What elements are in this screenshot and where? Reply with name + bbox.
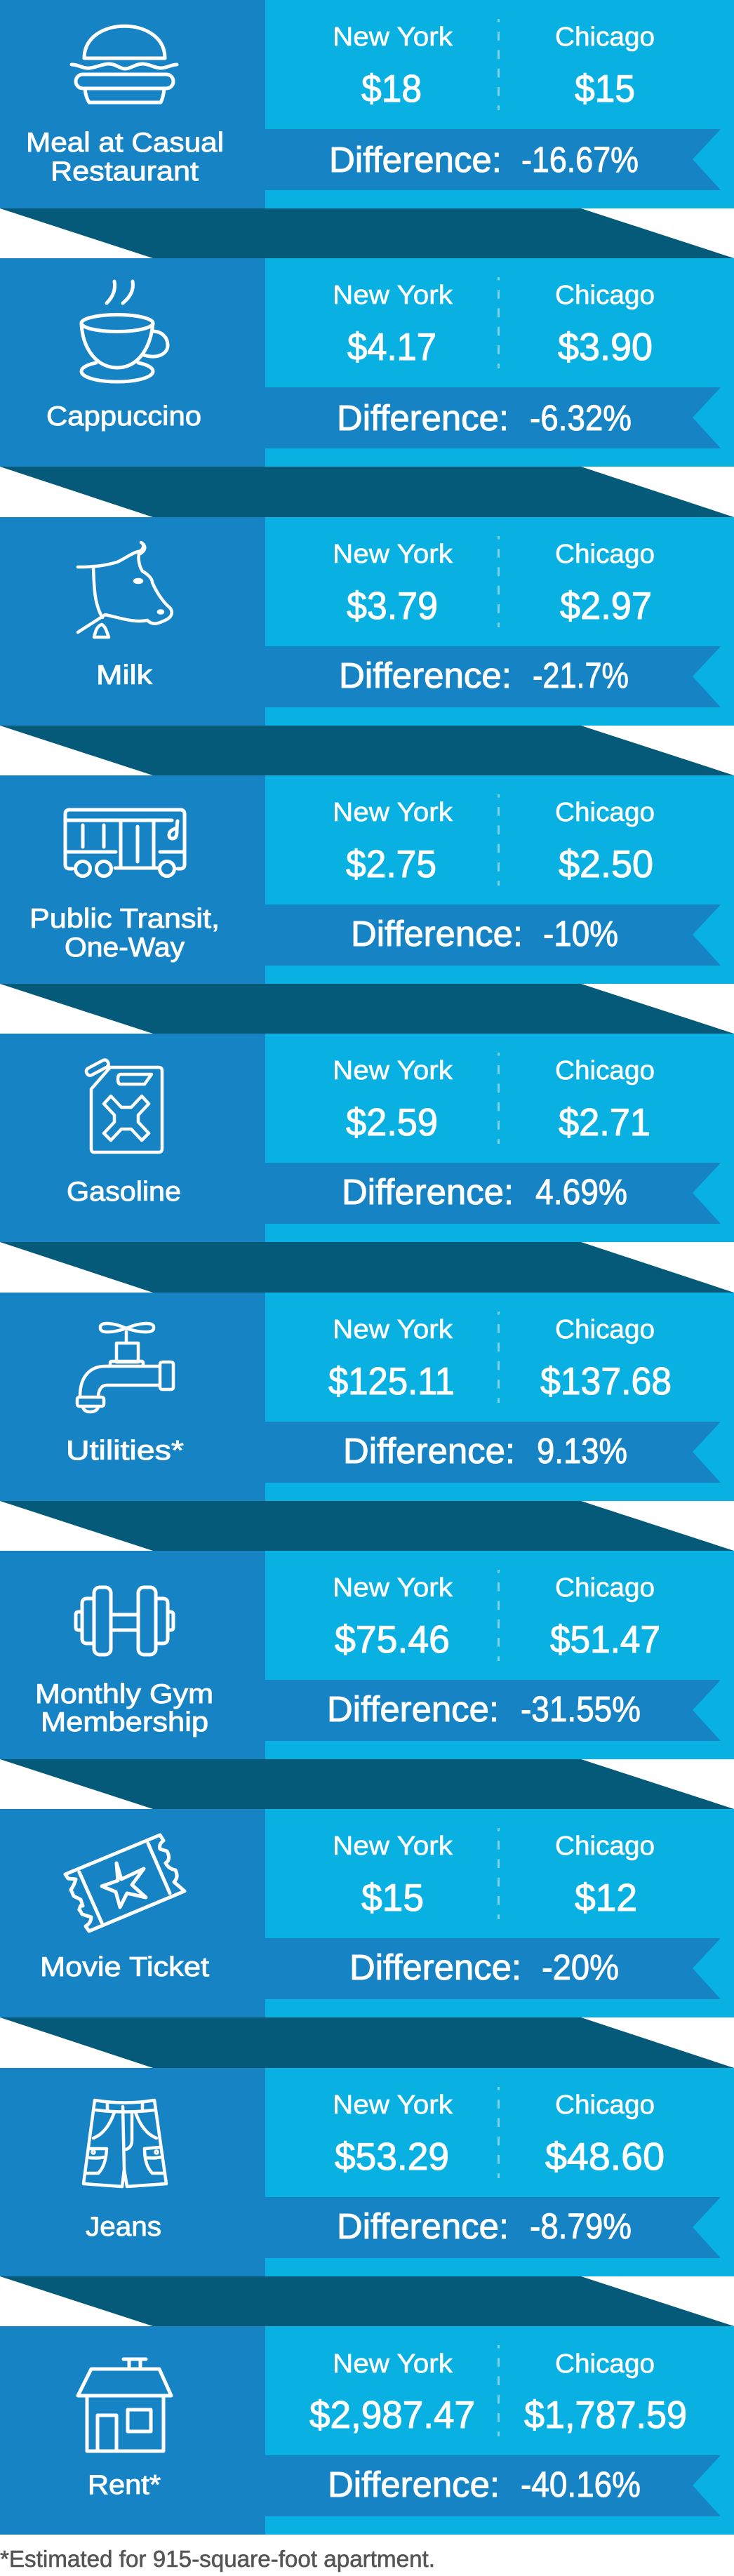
fold band 4 [0,984,734,1034]
footnote: *Estimated for 915-square-foot apartment. [0,2546,435,2572]
new york price [333,1831,453,1919]
icon: faucet [77,1323,173,1412]
chicago price [545,2090,665,2178]
new york price: $18 [361,67,422,110]
label: Jeans [86,2212,161,2242]
icon: house [78,2359,171,2451]
new york price: $75.46 [335,1617,450,1661]
difference: Difference: [342,1172,514,1212]
chicago price: Chicago [555,22,655,52]
difference: 9.13% [537,1431,627,1471]
chicago price [555,281,655,368]
chicago price: $137.68 [540,1359,672,1403]
icon: jeans [84,2100,166,2187]
new york price: $2.75 [346,842,436,886]
label: Public Transit, [29,904,220,934]
label [29,904,220,963]
chicago price: Chicago [555,540,655,569]
chicago price: Chicago [555,2349,655,2379]
chicago price: Chicago [555,1573,655,1603]
panel: utilities [0,1293,734,1501]
label: Movie Ticket [40,1952,209,1982]
chicago price: $12 [575,1876,637,1919]
chicago price [555,798,655,886]
chicago price: $2.97 [560,584,652,627]
new york price [333,22,453,110]
label: Gasoline [67,1177,181,1207]
icon: coffee cup [81,281,168,382]
new york price: New York [333,281,453,310]
difference: -10% [543,914,618,954]
fold band 1 [0,208,734,258]
label: Restaurant [51,156,199,187]
fold band 5 [0,1242,734,1293]
difference: -40.16% [521,2464,641,2504]
label: Rent* [88,2470,161,2500]
fold band 8 [0,2017,734,2068]
chicago price: $1,787.59 [524,2393,687,2436]
new york price [328,1315,455,1403]
chicago price: Chicago [555,1056,655,1086]
chicago price [524,2349,687,2436]
difference: -8.79% [530,2206,632,2246]
new york price: $53.29 [335,2135,449,2178]
new york price: New York [333,540,453,569]
label: Utilities* [66,1436,184,1466]
chicago price: $15 [575,67,635,110]
chicago price: Chicago [555,798,655,827]
panel: public transit [0,775,734,984]
icon: dumbbell [76,1587,173,1655]
new york price: New York [333,1831,453,1861]
new york price: $15 [361,1876,424,1919]
difference [339,655,629,695]
panel: rent [0,2326,734,2535]
difference [327,1689,641,1729]
difference [328,2464,641,2504]
label: Cappuccino [46,401,201,432]
label: Membership [41,1707,208,1737]
difference: Difference: [351,914,523,954]
chicago price [555,22,655,110]
chicago price: Chicago [555,281,655,310]
new york price [333,798,453,886]
new york price [333,281,453,368]
difference: Difference: [337,2206,509,2246]
panel: monthly gym membership [0,1551,734,1759]
chicago price [555,540,655,627]
difference: 4.69% [535,1172,627,1212]
chicago price [555,1056,655,1144]
panel: cappuccino [0,258,734,467]
difference: Difference: [327,1689,499,1729]
difference [351,914,618,954]
icon: cow [78,542,172,637]
new york price: $4.17 [347,325,436,368]
difference: Difference: [349,1947,521,1987]
chicago price: Chicago [555,2090,655,2120]
difference [342,1172,627,1212]
chicago price [540,1315,672,1403]
label [26,128,224,187]
new york price [333,540,453,627]
panel: jeans [0,2068,734,2276]
chicago price [555,1831,655,1919]
new york price: New York [333,1573,453,1603]
panel: gasoline [0,1034,734,1242]
new york price: New York [333,1315,453,1344]
chicago price: $48.60 [545,2135,665,2178]
fold band 2 [0,467,734,517]
panel: movie ticket [0,1809,734,2017]
chicago price: $2.50 [559,842,653,886]
icon: bus [65,810,185,876]
new york price [333,2090,453,2178]
difference: Difference: [329,140,502,180]
new york price: New York [333,798,453,827]
difference [337,2206,632,2246]
fold band 3 [0,726,734,775]
difference [349,1947,619,1987]
new york price [309,2349,475,2436]
difference: -6.32% [530,398,632,438]
new york price: $125.11 [328,1359,455,1403]
chicago price: $51.47 [550,1617,660,1661]
difference: -20% [542,1947,619,1987]
new york price: New York [333,2090,453,2120]
difference: Difference: [339,655,512,695]
difference [343,1431,627,1471]
new york price: New York [333,1056,453,1086]
new york price: $2.59 [346,1100,438,1144]
icon: ticket [65,1835,185,1931]
icon: burger [72,26,177,102]
new york price: New York [333,22,453,52]
chicago price: Chicago [555,1831,655,1861]
difference [329,140,639,180]
label [35,1679,213,1737]
difference: -16.67% [521,140,639,180]
fold band 6 [0,1501,734,1551]
chicago price: $2.71 [559,1100,650,1144]
difference: Difference: [343,1431,515,1471]
difference: -21.7% [533,655,629,695]
difference [337,398,632,438]
panel: meal at casual restaurant [0,0,734,208]
label: Milk [96,660,153,690]
new york price: $2,987.47 [309,2393,475,2436]
fold band 9 [0,2276,734,2326]
difference: Difference: [328,2464,500,2504]
new york price: New York [333,2349,453,2379]
fold band 7 [0,1759,734,1809]
chicago price: Chicago [555,1315,655,1344]
label: One-Way [65,933,185,963]
difference: -31.55% [521,1689,641,1729]
new york price [333,1573,453,1661]
new york price: $3.79 [347,584,438,627]
panel: milk [0,517,734,726]
new york price [333,1056,453,1144]
chicago price: $3.90 [558,325,653,368]
chicago price [550,1573,660,1661]
label: Monthly Gym [35,1679,213,1709]
icon: gas can [85,1059,162,1152]
difference: Difference: [337,398,509,438]
label: Meal at Casual [26,128,224,158]
